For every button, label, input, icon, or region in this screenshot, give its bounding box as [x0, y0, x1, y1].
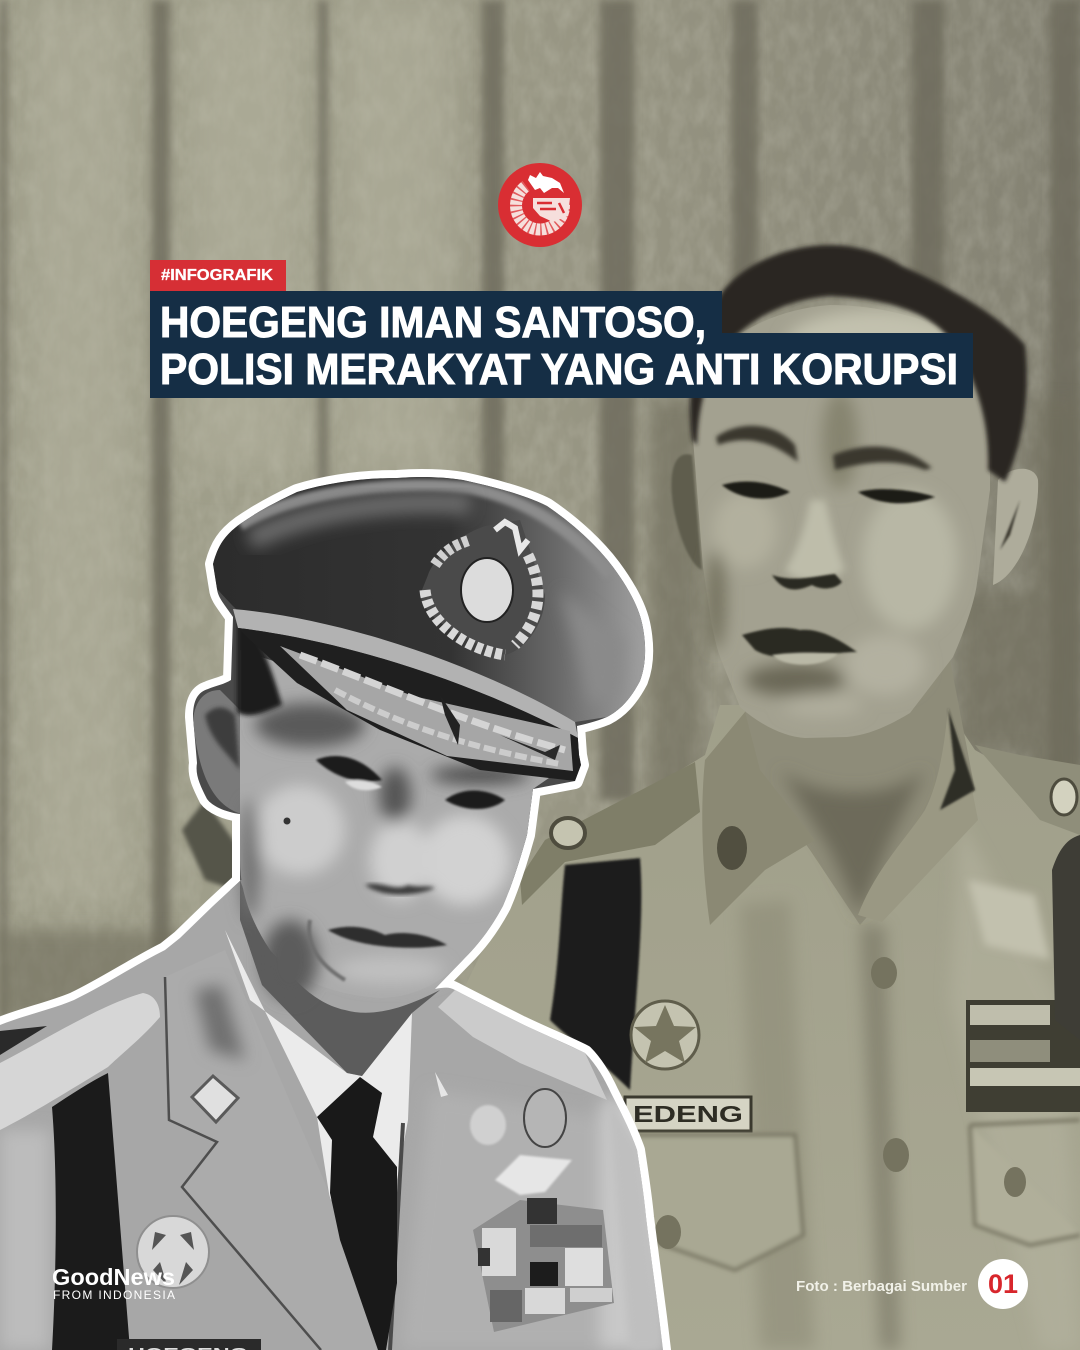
- eyebrows and eyes: [716, 426, 935, 503]
- photo credit: Foto : Berbagai Sumber: [796, 1278, 967, 1295]
- uniform: [455, 705, 1080, 1350]
- strap: [550, 858, 641, 1090]
- cap badge: [420, 520, 545, 655]
- visor with embroidery: [238, 628, 581, 781]
- mole: [284, 818, 290, 824]
- right lapel line: [390, 1123, 403, 1350]
- star badge: [137, 1216, 209, 1288]
- brand logo: GoodNews from Indonesia: GoodNews: [52, 1264, 175, 1290]
- background shoulder patch: [182, 800, 240, 890]
- name tag: EDENG: [633, 1101, 743, 1127]
- left epaulette: [0, 993, 160, 1130]
- black tie: [317, 1077, 397, 1350]
- shoulder board: [520, 762, 700, 905]
- emblem bar: [533, 198, 570, 222]
- eyes: [316, 756, 505, 809]
- title: [150, 291, 973, 398]
- collar: [702, 708, 978, 925]
- pockets: [635, 1120, 1080, 1270]
- collar pin: [717, 826, 747, 870]
- right epaulette: [438, 990, 607, 1100]
- face: [240, 658, 549, 964]
- black strap: [52, 1073, 130, 1350]
- tag: #INFOGRAFIK: #INFOGRAFIK: [161, 267, 273, 284]
- right arm highlight: [616, 1124, 644, 1334]
- left lapel: [329, 1194, 331, 1200]
- tag: #INFOGRAFIK: [150, 260, 286, 292]
- ears: [671, 454, 1038, 585]
- logo: Garuda G badge: [498, 163, 582, 247]
- right ear: [193, 690, 240, 814]
- brand logo: GoodNews from Indonesia: FROM INDONESIA: [53, 1288, 175, 1302]
- eagle head: [528, 172, 564, 193]
- jacket: [0, 880, 670, 1350]
- name tag: [625, 1097, 751, 1131]
- name tag: [117, 1339, 261, 1350]
- page number: [978, 1259, 1028, 1309]
- head base: [180, 470, 660, 890]
- page number: 01: [988, 1269, 1018, 1299]
- cap crown: [213, 477, 645, 722]
- emblem ring: [516, 186, 564, 229]
- chest insignia: [435, 1072, 572, 1195]
- title: HOEGENG IMAN SANTOSO,: [160, 298, 706, 347]
- chest emblem: [968, 880, 1050, 960]
- microphone: [1052, 835, 1080, 1040]
- white cutout outline: [0, 477, 663, 1350]
- mouth: [328, 927, 447, 948]
- nose: [785, 500, 845, 581]
- neck: [745, 660, 975, 925]
- neck: [240, 880, 440, 1076]
- title: POLISI MERAKYAT YANG ANTI KORUPSI: [160, 345, 958, 394]
- medal ribbons: [473, 1198, 614, 1332]
- photo: background portrait of Hoegeng: [455, 245, 1080, 1350]
- face: [690, 305, 990, 738]
- white shirt: [225, 930, 412, 1200]
- medals: [966, 1000, 1080, 1112]
- hair side: [237, 612, 282, 715]
- hair: [690, 245, 1027, 482]
- cap band: [233, 609, 578, 738]
- mouth: [742, 628, 857, 665]
- collar pin: [192, 1076, 238, 1122]
- photo: foreground cutout portrait with white outline: [0, 470, 670, 1350]
- buttons: [655, 957, 1026, 1249]
- star badge: [631, 1001, 699, 1069]
- nose: [365, 884, 435, 895]
- brand logo: GoodNews from Indonesia: [52, 1264, 175, 1302]
